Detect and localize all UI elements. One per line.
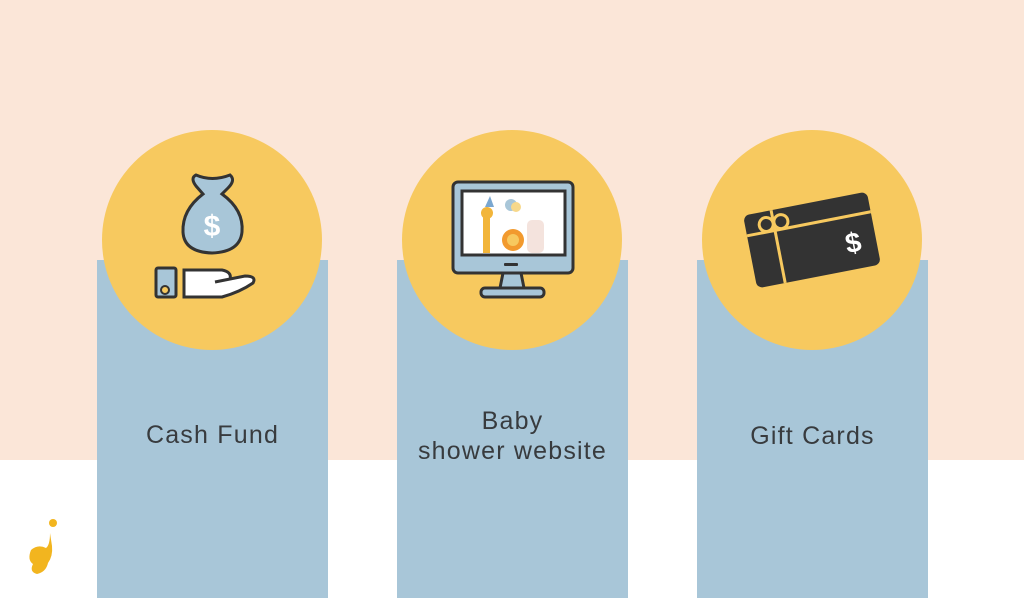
background — [0, 0, 1024, 460]
text: gift cards: Gift Cards — [750, 422, 875, 450]
icon: money bag and hand — [102, 130, 322, 350]
icon: gift card — [702, 130, 922, 350]
icon: money bag and hand: $ — [204, 210, 221, 243]
panel: gift cards — [697, 260, 928, 598]
text: baby shower website: shower website — [418, 437, 607, 465]
icon: logo — [29, 519, 57, 574]
text: baby shower website: Baby — [482, 407, 543, 435]
text: baby shower website — [418, 407, 607, 465]
text: cash fund: Cash Fund — [146, 421, 279, 449]
icon: monitor — [402, 130, 622, 350]
panel: website — [397, 260, 628, 598]
icon: gift card: $ — [843, 226, 864, 259]
panel: cash fund — [97, 260, 328, 598]
